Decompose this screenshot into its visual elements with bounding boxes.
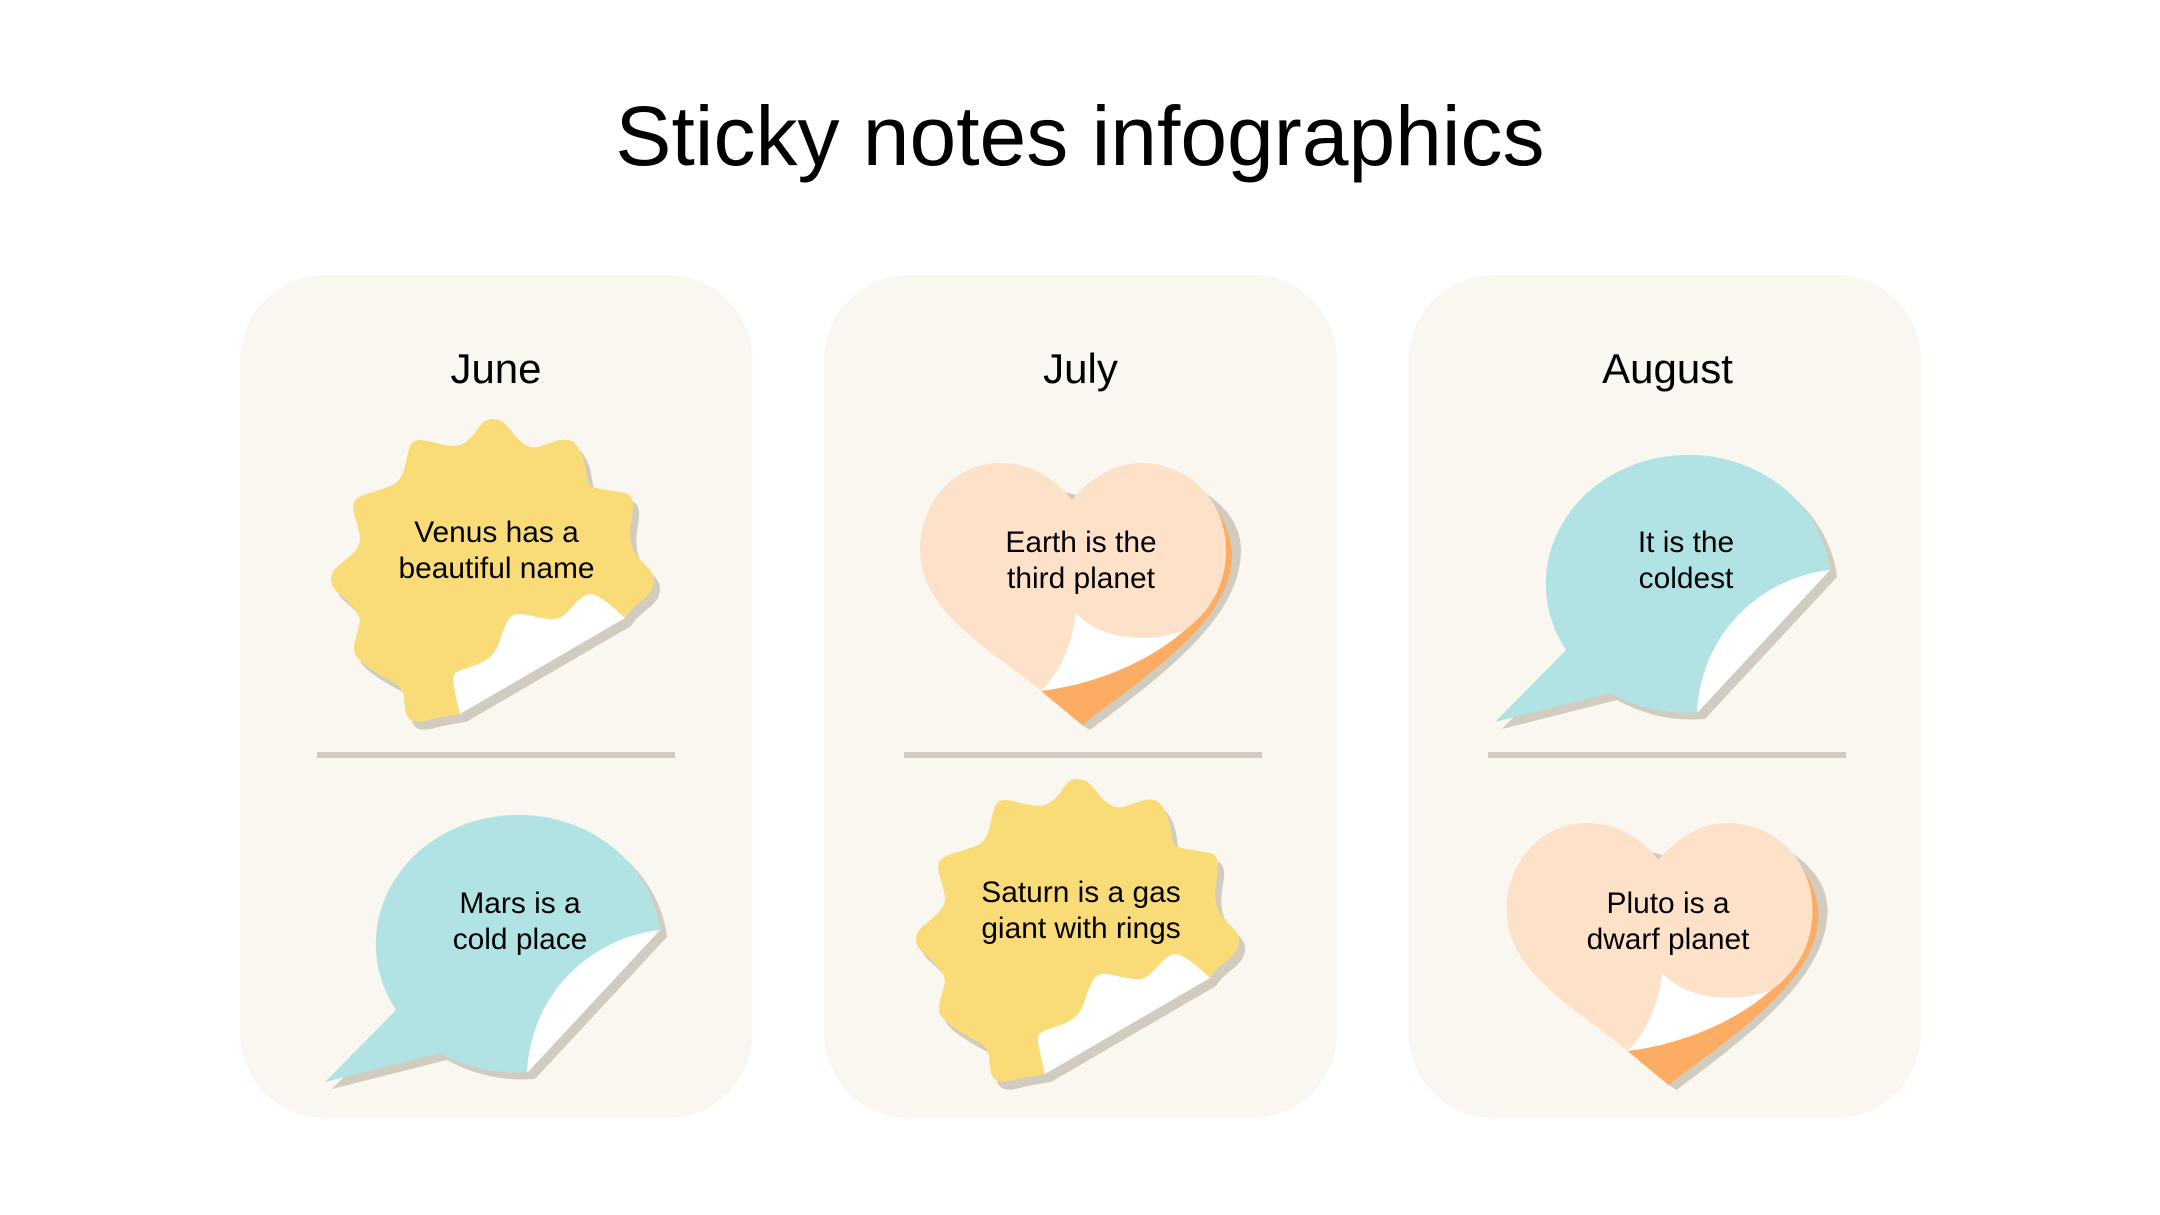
title: Sticky notes infographics: [615, 89, 1545, 183]
note text: Venus: beautiful name: [398, 552, 595, 585]
note text: Saturn: giant with rings: [981, 912, 1181, 945]
note text: Earth: Earth is the: [1005, 526, 1157, 559]
note text: Mars: cold place: [453, 923, 587, 956]
panel: August: [1408, 275, 1921, 1118]
note text: Venus: [398, 516, 595, 585]
heading: July: July: [1043, 345, 1118, 392]
note text: coldest: [1638, 526, 1734, 595]
panel: June: [240, 275, 752, 1118]
note text: coldest: coldest: [1639, 562, 1734, 595]
note text: Mars: Mars is a: [459, 887, 581, 920]
note text: Saturn: Saturn is a gas: [981, 876, 1181, 909]
note text: Earth: [1005, 526, 1157, 595]
sticky note: Venus star: [331, 419, 660, 730]
sticky note: coldest speech bubble: [1495, 455, 1837, 729]
sticky note: Pluto heart: [1506, 823, 1828, 1090]
note text: Pluto: Pluto is a: [1607, 887, 1730, 920]
panel: July: [824, 275, 1337, 1118]
note text: Mars: [453, 887, 587, 956]
note text: Earth: third planet: [1007, 562, 1156, 595]
sticky note: Saturn star: [916, 779, 1245, 1090]
heading: June: June: [450, 345, 542, 392]
sticky note: Mars speech bubble: [325, 815, 667, 1089]
heading: August: August: [1602, 345, 1733, 392]
note text: Pluto: dwarf planet: [1587, 923, 1750, 956]
note text: Pluto: [1587, 887, 1750, 956]
note text: Venus: Venus has a: [414, 516, 579, 549]
note text: coldest: It is the: [1638, 526, 1734, 559]
sticky note: Earth heart: [920, 463, 1241, 730]
note text: Saturn: [981, 876, 1181, 945]
